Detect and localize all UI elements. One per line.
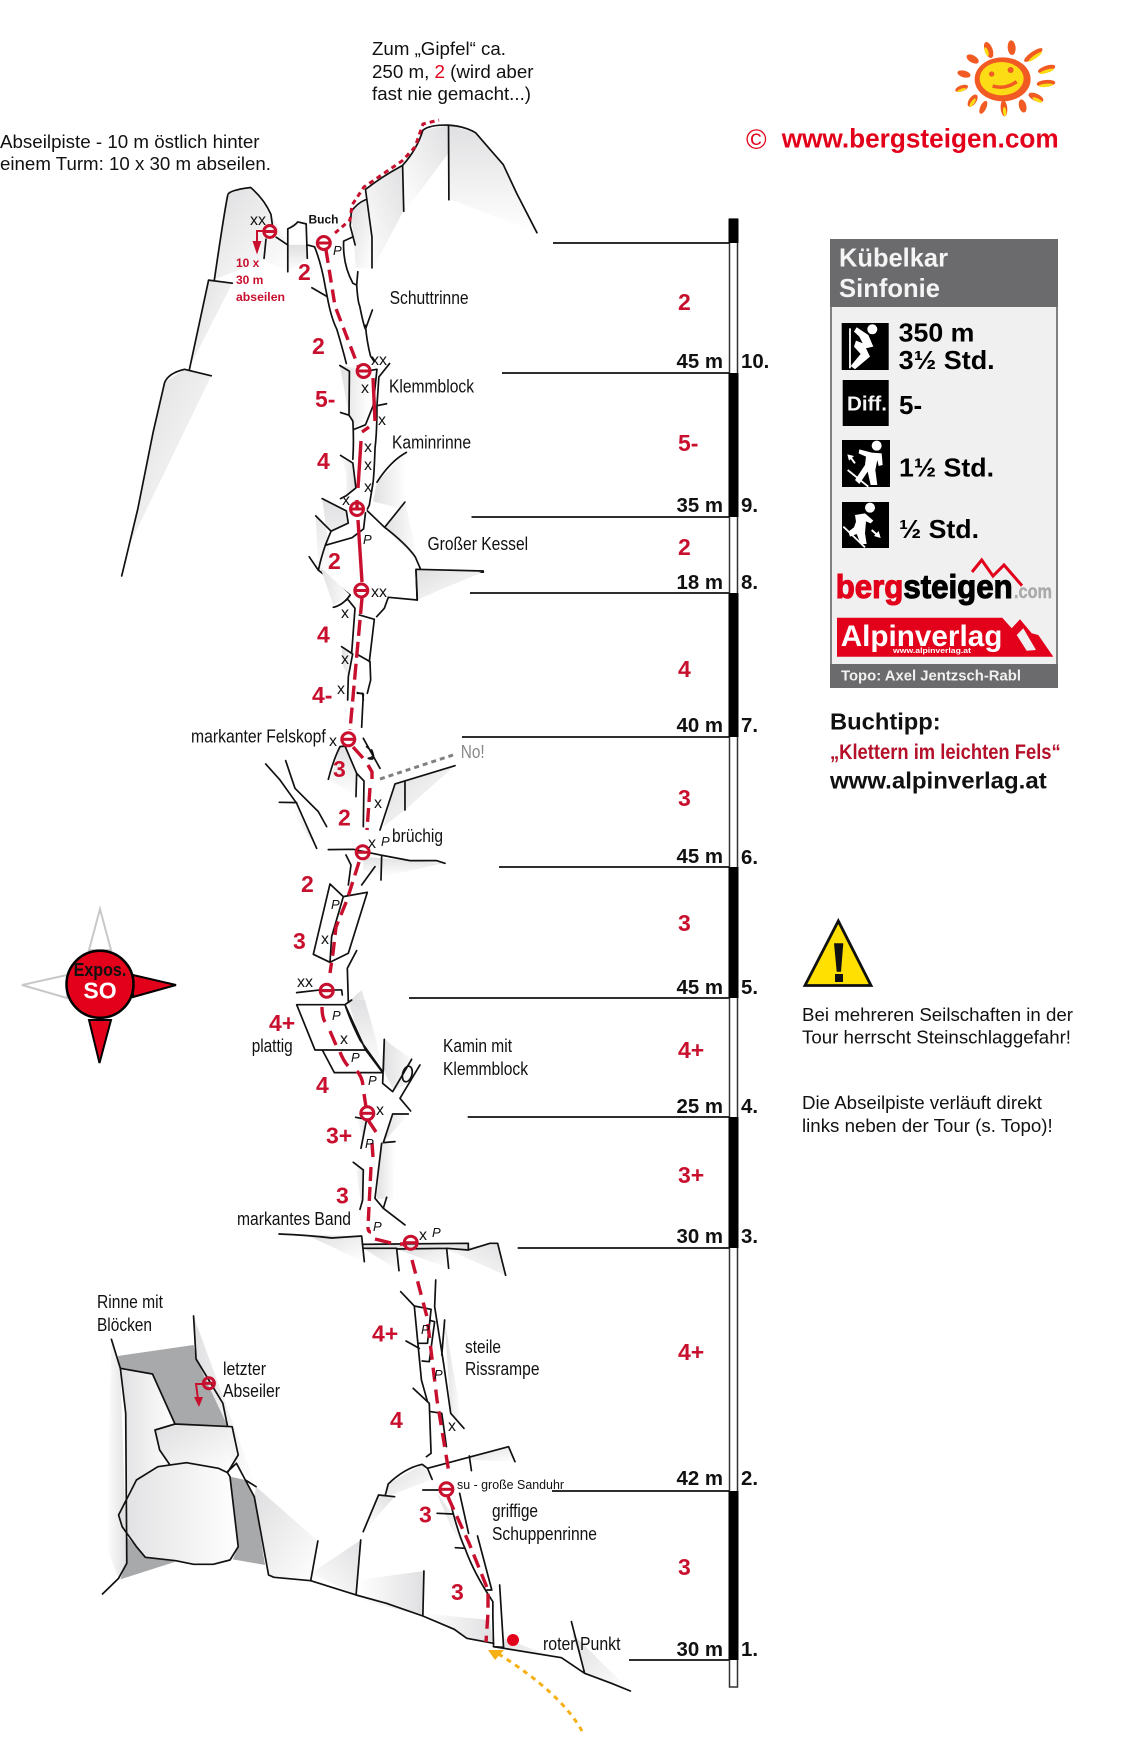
- pitch lengths and numbers: 5.: [741, 977, 758, 999]
- climbing grades beside route: [269, 259, 464, 1605]
- logo: Alpinverlag: www.alpinverlag.at: [892, 648, 972, 655]
- route text labels: Rinne mit: [97, 1292, 163, 1312]
- bolt marks x: x: [329, 733, 337, 750]
- route text labels: fast nie gemacht...): [372, 84, 531, 104]
- climbing grades beside route: 2: [301, 871, 314, 897]
- pitch lengths and numbers: 45 m: [677, 351, 723, 373]
- bolt marks x: x: [376, 1102, 384, 1119]
- route text labels: Buch: [308, 212, 338, 226]
- rock drawing: upper section with summit and tower: [122, 125, 537, 600]
- pitch grades column: 3+: [678, 1162, 704, 1188]
- pitch scale bar: [409, 219, 738, 1687]
- bolt marks x: x: [321, 931, 329, 948]
- bolt marks x: xx: [371, 584, 387, 601]
- abseil note in red: [236, 256, 285, 304]
- route text labels: markantes Band: [237, 1209, 351, 1229]
- piton marks P: P: [381, 834, 390, 849]
- climbing grades beside route: 3: [336, 1182, 349, 1208]
- pitch grades column: 2: [678, 534, 691, 560]
- stats: length and time: [899, 318, 995, 375]
- piton marks P: P: [434, 1367, 443, 1382]
- piton marks P: P: [332, 1008, 341, 1023]
- bolt marks x: x: [364, 457, 372, 474]
- piton marks P: P: [421, 1322, 430, 1337]
- pitch lengths and numbers: 40 m: [677, 715, 723, 737]
- note text: abseil piste: links neben der Tour (s. Topo)!: [802, 1116, 1053, 1136]
- bolt marks x: x: [448, 1418, 456, 1435]
- pitch grades column: 3: [678, 910, 691, 936]
- climbing grades beside route: 2: [312, 333, 325, 359]
- pitch lengths and numbers: 7.: [741, 715, 758, 737]
- pitch lengths and numbers: 45 m: [677, 846, 723, 868]
- climbing grades beside route: 3: [451, 1579, 464, 1605]
- route text labels: einem Turm: 10 x 30 m abseilen.: [0, 154, 271, 174]
- book tip: [829, 708, 1061, 794]
- approach time: 1½ Std.: [899, 453, 994, 483]
- route text labels: 250 m, 2 (wird aber: [372, 62, 534, 82]
- pitch lengths and numbers: [677, 351, 769, 1661]
- bolt marks x: x: [419, 1227, 427, 1244]
- pitch lengths and numbers: 2.: [741, 1468, 758, 1490]
- abseil arrow: last rappel: [194, 1384, 204, 1407]
- pitch grades column: 5-: [678, 430, 698, 456]
- pitch grades column: 3: [678, 785, 691, 811]
- panel header: tour name: [830, 239, 1058, 307]
- route text labels: Kaminrinne: [392, 432, 471, 452]
- climbing route: red dashed line: [322, 250, 488, 1642]
- note text: abseil piste: [802, 1093, 1053, 1136]
- book tip: „Klettern im leichten Fels“: [830, 740, 1061, 764]
- pitch lengths and numbers: 10.: [741, 351, 769, 373]
- piton marks P: P: [351, 1050, 360, 1065]
- piton marks P: P: [368, 1073, 377, 1088]
- bolt marks x: [250, 212, 456, 1435]
- climbing grades beside route: 4: [317, 622, 330, 648]
- rock drawing: middle section below Großer Kessel: [320, 567, 483, 700]
- icon: approach hiker: [842, 440, 890, 487]
- icon: difficulty: [843, 380, 889, 426]
- bolt marks x: x: [364, 479, 372, 496]
- piton marks P: P: [373, 1219, 382, 1234]
- bolt marks x: x: [364, 439, 372, 456]
- route text labels: steile: [465, 1337, 501, 1357]
- compass: exposition SO: [22, 909, 176, 1063]
- route text labels: Abseiler: [223, 1381, 280, 1401]
- descent time: ½ Std.: [899, 514, 979, 544]
- pitch lengths and numbers: 4.: [741, 1096, 758, 1118]
- climbing grades beside route: 2: [298, 259, 311, 285]
- bolt marks x: x: [361, 380, 369, 397]
- pitch lengths and numbers: 8.: [741, 572, 758, 594]
- panel: tour info: [830, 239, 1058, 688]
- pitch grades column: [678, 289, 704, 1580]
- pitch lengths and numbers: 18 m: [677, 572, 723, 594]
- logo: bergsteigen.com: [836, 560, 1052, 605]
- red dot marker: [507, 1634, 519, 1646]
- climbing grades beside route: 4: [317, 448, 330, 474]
- icon: difficulty: Diff.: [847, 394, 887, 416]
- icon: warning triangle: [805, 921, 871, 986]
- warning text: rockfall: [802, 1005, 1073, 1047]
- panel header: tour name: Kübelkar: [839, 243, 948, 273]
- icon: climber: [842, 323, 889, 370]
- pitch lengths and numbers: 30 m: [677, 1639, 723, 1661]
- logo: Alpinverlag: Alpinverlag: [841, 620, 1002, 653]
- bolt marks x: x: [342, 492, 350, 509]
- approach: yellow dotted arrow: [488, 1650, 582, 1731]
- bolt marks x: x: [374, 795, 382, 812]
- bolt marks x: xx: [250, 212, 266, 229]
- website copyright line: ©: [746, 124, 767, 155]
- climbing grades beside route: 3: [293, 928, 306, 954]
- route text labels: markanter Felskopf: [191, 727, 327, 747]
- belay stations: [203, 226, 453, 1496]
- route text labels: brüchig: [392, 826, 443, 846]
- bolt marks x: x: [368, 835, 376, 852]
- climbing grades beside route: 3: [419, 1502, 432, 1528]
- route text labels: griffige: [492, 1501, 538, 1521]
- warning text: rockfall: Tour herrscht Steinschlaggefahr!: [802, 1027, 1071, 1047]
- route text labels: Großer Kessel: [428, 534, 528, 554]
- icon: descent hiker: [842, 502, 889, 548]
- route text labels: Kamin mit: [443, 1036, 512, 1056]
- route text labels: Rissrampe: [465, 1359, 540, 1379]
- pitch lengths and numbers: 3.: [741, 1226, 758, 1248]
- abseil arrow: top: [252, 231, 269, 254]
- stats: length and time: 3½ Std.: [899, 345, 995, 375]
- pitch lengths and numbers: 45 m: [677, 977, 723, 999]
- route text labels: Schuppenrinne: [492, 1524, 597, 1544]
- piton marks P: P: [432, 1225, 441, 1240]
- climbing grades beside route: 4: [316, 1072, 329, 1098]
- route text labels: No!: [461, 742, 485, 762]
- warning text: rockfall: Bei mehreren Seilschaften in der: [802, 1005, 1073, 1025]
- climbing grades beside route: 2: [338, 805, 351, 831]
- climbing grades beside route: 3+: [326, 1122, 352, 1148]
- logo: bergsteigen.com: bergsteigen: [836, 568, 1013, 605]
- climbing grades beside route: 3: [333, 756, 346, 782]
- stats: length and time: 350 m: [899, 318, 974, 348]
- bolt marks x: x: [378, 412, 386, 429]
- route text labels: [0, 39, 620, 1654]
- pitch grades column: 4+: [678, 1339, 704, 1365]
- pitch grades column: 3: [678, 1554, 691, 1580]
- rock drawing: Felskopf and brüchig section: [266, 693, 455, 1050]
- bolt marks x: x: [337, 681, 345, 698]
- route text labels: Schuttrinne: [390, 288, 469, 308]
- route text labels: Klemmblock: [389, 377, 475, 397]
- climbing grades beside route: 4+: [269, 1010, 295, 1036]
- bolt marks x: x: [340, 1031, 348, 1048]
- piton marks P: P: [365, 1136, 374, 1151]
- pitch lengths and numbers: 9.: [741, 495, 758, 517]
- pitch lengths and numbers: 1.: [741, 1639, 758, 1661]
- compass: exposition SO: SO: [83, 978, 117, 1004]
- difficulty value: 5-: [899, 390, 922, 420]
- wrong way: grey dotted line: [380, 755, 453, 779]
- panel header: tour name: Sinfonie: [839, 273, 940, 303]
- website copyright line: www.bergsteigen.com: [781, 123, 1059, 153]
- pitch lengths and numbers: 35 m: [677, 495, 723, 517]
- route text labels: su - große Sanduhr: [457, 1478, 564, 1492]
- bolt marks x: xx: [371, 352, 387, 369]
- route text labels: letzter: [223, 1359, 266, 1379]
- route text labels: Blöcken: [97, 1315, 152, 1335]
- panel footer: topo credit: Topo: Axel Jentzsch-Rabl: [841, 668, 1021, 685]
- climbing grades beside route: 4+: [372, 1320, 398, 1346]
- piton marks P: P: [331, 897, 340, 912]
- route text labels: Abseilpiste - 10 m östlich hinter: [0, 132, 260, 152]
- piton marks P: P: [333, 243, 342, 258]
- climbing grades beside route: 2: [328, 548, 341, 574]
- bolt marks x: xx: [297, 974, 313, 991]
- route text labels: plattig: [252, 1036, 293, 1056]
- pitch lengths and numbers: 6.: [741, 847, 758, 869]
- climbing grades beside route: 4: [390, 1407, 403, 1433]
- pitch grades column: 4+: [678, 1037, 704, 1063]
- pitch grades column: 2: [678, 289, 691, 315]
- sun logo: [954, 40, 1056, 117]
- route text labels: Zum „Gipfel“ ca.: [372, 39, 506, 59]
- bolt marks x: x: [341, 651, 349, 668]
- compass: exposition SO: Expos.: [74, 960, 126, 980]
- abseil note in red: 30 m: [236, 273, 263, 287]
- piton marks P: P: [363, 532, 372, 547]
- book tip: www.alpinverlag.at: [829, 768, 1047, 794]
- note text: abseil piste: Die Abseilpiste verläuft direkt: [802, 1093, 1042, 1113]
- panel footer: topo credit: [830, 664, 1058, 688]
- climbing grades beside route: 4-: [312, 682, 332, 708]
- route text labels: roter Punkt: [543, 1634, 620, 1654]
- abseil note in red: abseilen: [236, 290, 285, 304]
- climbing grades beside route: 5-: [315, 386, 335, 412]
- rock drawing: plattig, Kamin and markantes Band: [279, 1000, 506, 1275]
- piton marks P: [331, 243, 443, 1382]
- book tip: Buchtipp:: [830, 708, 941, 734]
- pitch grades column: 4: [678, 656, 691, 682]
- bolt marks x: x: [341, 605, 349, 622]
- pitch lengths and numbers: 30 m: [677, 1226, 723, 1248]
- abseil note in red: 10 x: [236, 256, 260, 270]
- rock drawing: lower section with Rinne, boulders and ground line: [102, 1280, 630, 1691]
- logo: Alpinverlag: [837, 618, 1053, 657]
- summit route: red dotted line: [335, 120, 439, 233]
- pitch lengths and numbers: 25 m: [677, 1096, 723, 1118]
- route text labels: Klemmblock: [443, 1059, 529, 1079]
- pitch lengths and numbers: 42 m: [677, 1468, 723, 1490]
- logo: bergsteigen.com: .com: [1014, 582, 1052, 603]
